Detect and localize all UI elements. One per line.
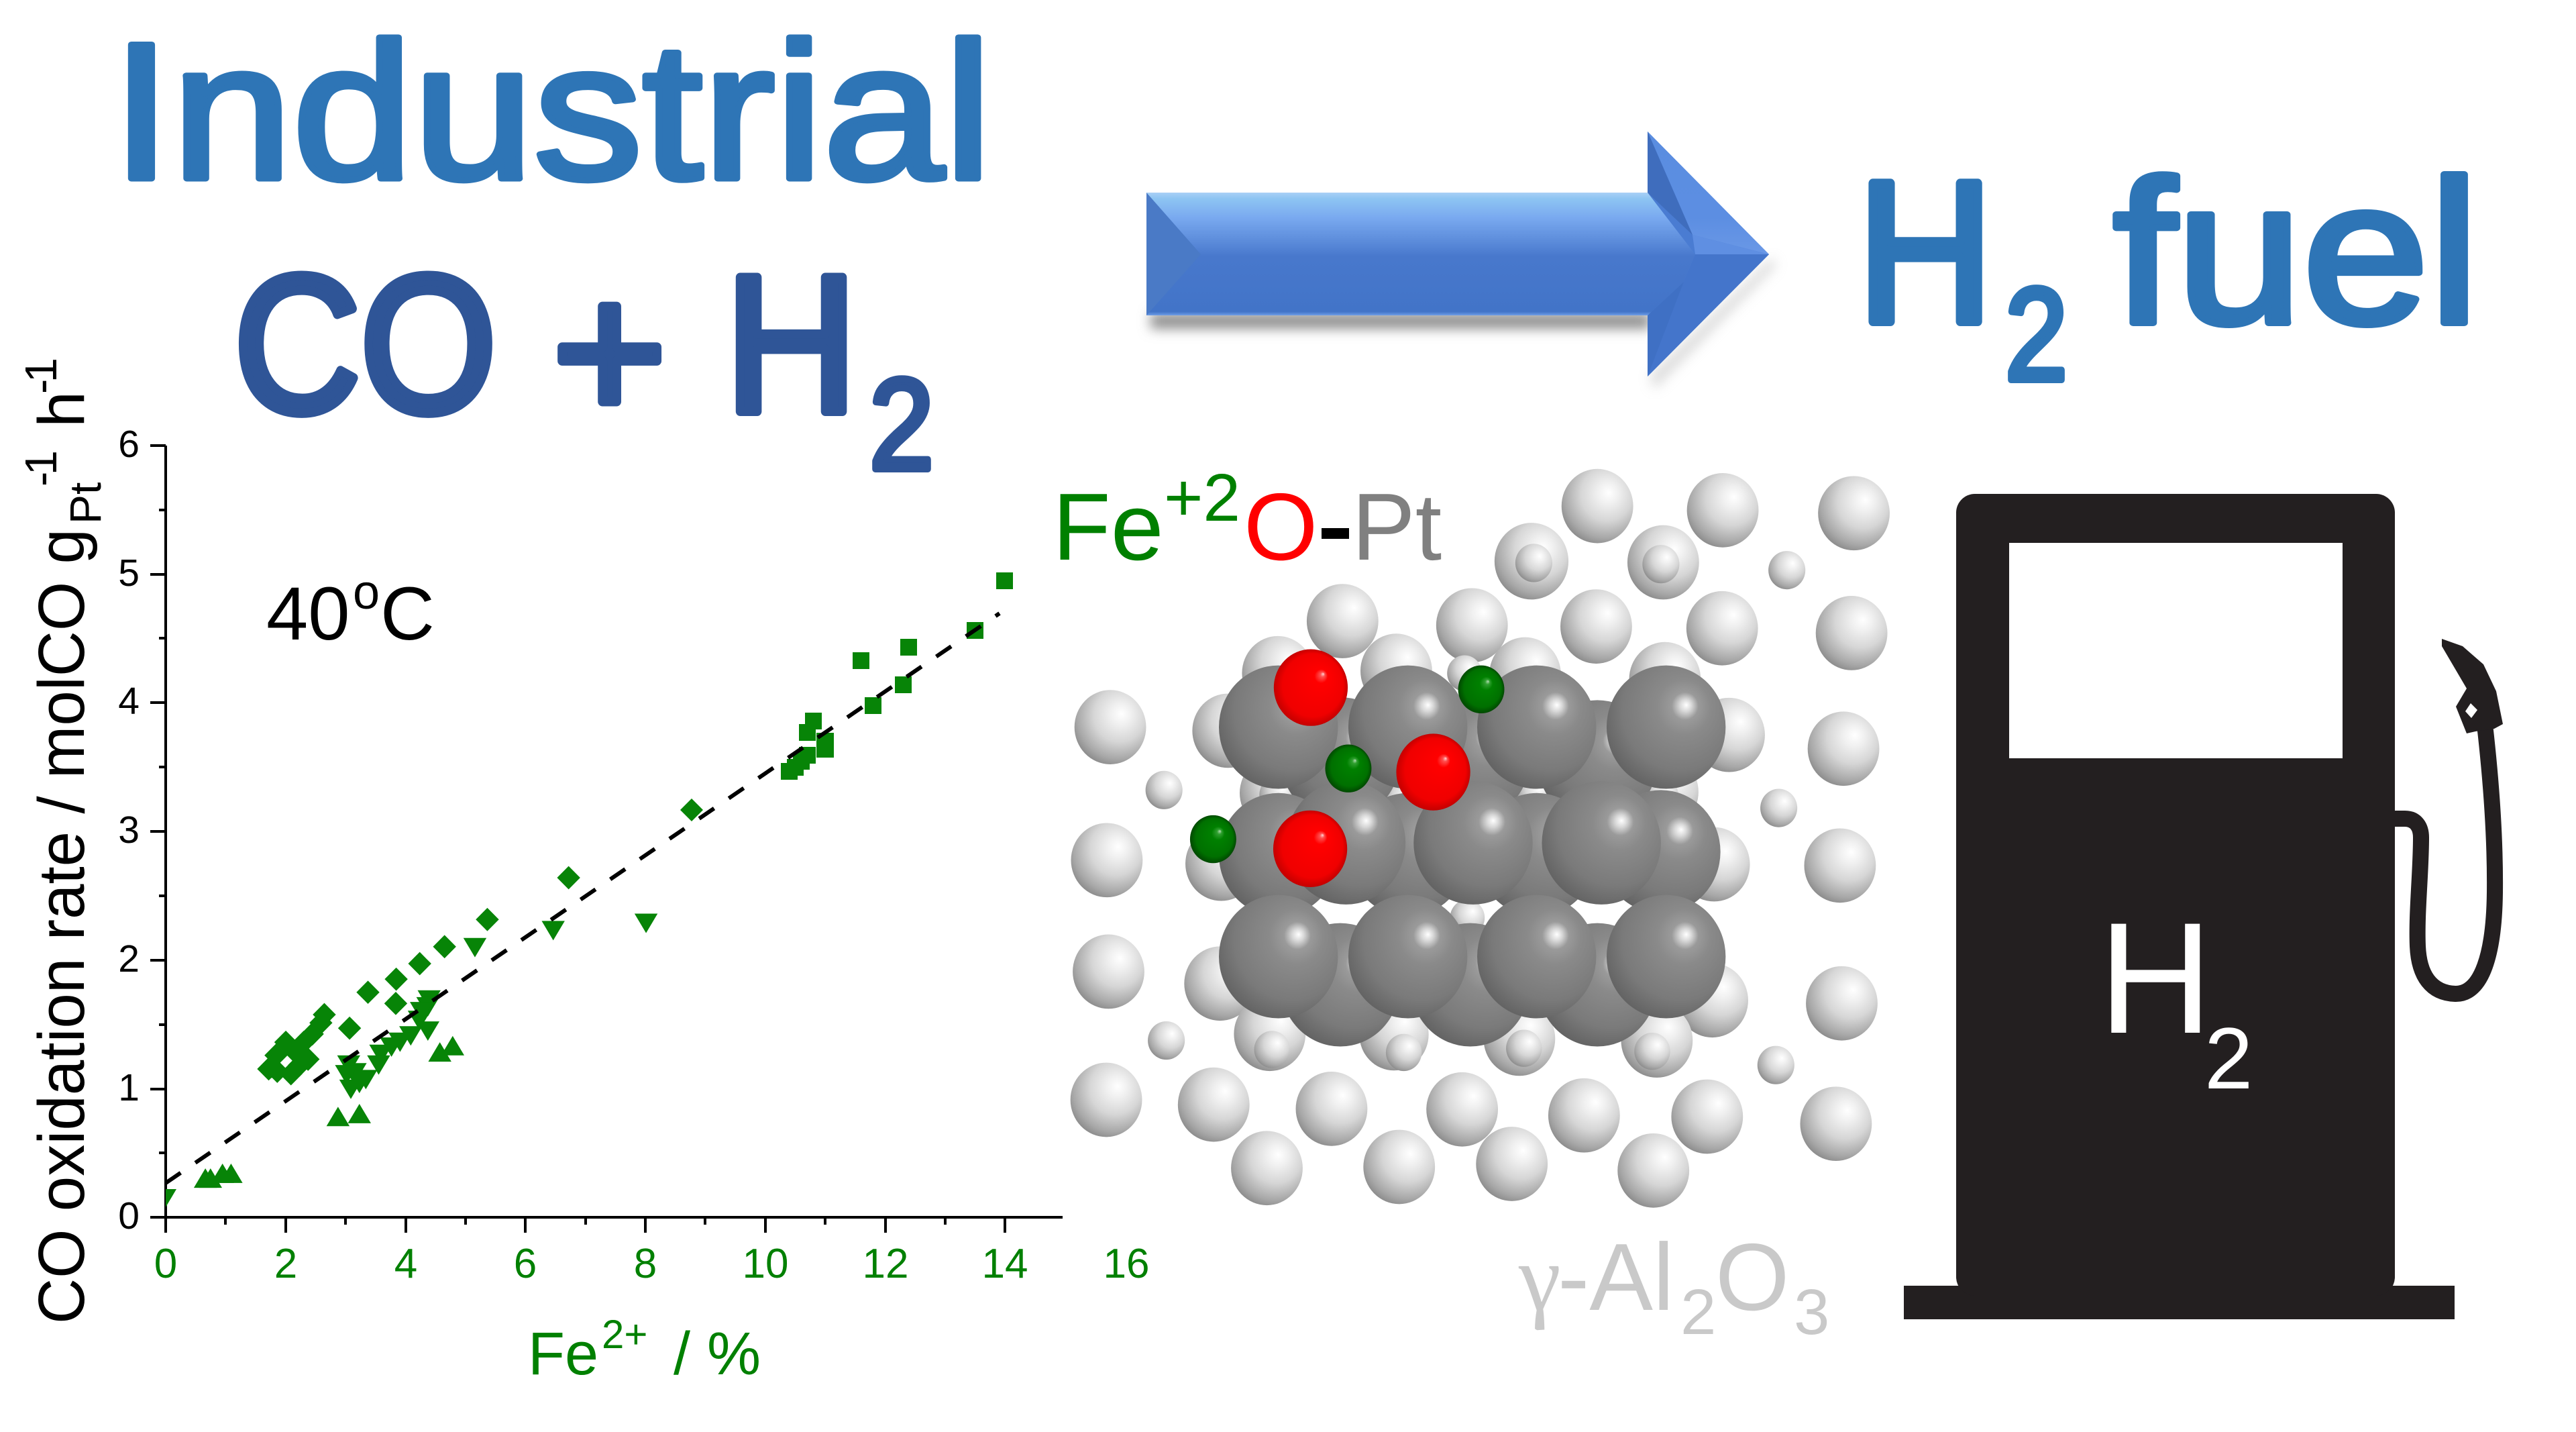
x tick labels: 2: [274, 1241, 297, 1287]
temperature label: o: [353, 566, 380, 619]
axes and ticks: [150, 446, 1063, 1233]
x tick labels: 12: [863, 1241, 908, 1287]
heading: Fe+2O-Pt label: +2: [1164, 460, 1240, 535]
y tick labels: [118, 423, 140, 1237]
y tick labels: 0: [118, 1194, 140, 1237]
heading: H2 fuel: H: [1858, 140, 1993, 364]
temperature label: [266, 566, 435, 656]
heading: H2 fuel: [1858, 138, 2479, 408]
label: gamma alumina: 2: [1680, 1276, 1716, 1348]
pump base: [1904, 1286, 2455, 1319]
hose: [2392, 725, 2495, 994]
y tick labels: 2: [118, 937, 140, 980]
heading: H2 fuel: 2: [2005, 261, 2068, 408]
x tick labels: 10: [743, 1241, 788, 1287]
x tick labels: 4: [394, 1241, 417, 1287]
x tick labels: 14: [982, 1241, 1028, 1287]
pump screen: [2009, 543, 2343, 758]
heading: CO + H2: H: [725, 236, 857, 453]
heading: Fe+2O-Pt label: Pt: [1352, 474, 1442, 580]
y tick labels: 6: [118, 423, 140, 466]
x axis title: Fe: [528, 1321, 598, 1388]
icon: hydrogen fuel pump: [1904, 494, 2503, 1319]
heading: CO + H2: [234, 236, 934, 497]
pump H2 label: H: [2098, 890, 2212, 1067]
heading: Fe+2O-Pt label: O: [1244, 474, 1318, 580]
label: gamma alumina: [1518, 1224, 1829, 1348]
x axis title: 2+: [602, 1312, 647, 1357]
x tick labels: 16: [1104, 1241, 1149, 1287]
x tick labels: 0: [154, 1241, 177, 1287]
x axis title: / %: [674, 1321, 761, 1388]
heading: CO + H2: +: [553, 243, 666, 460]
oxygen atoms: [1273, 650, 1470, 887]
chart: CO oxidation rate vs Fe2+: [16, 358, 1149, 1388]
heading: Fe+2O-Pt label: Fe: [1053, 474, 1164, 580]
y axis title: -1: [16, 358, 66, 394]
y tick labels: 1: [118, 1066, 140, 1109]
y axis title: CO oxidation rate / molCO g: [25, 529, 98, 1324]
x tick labels: 8: [634, 1241, 657, 1287]
heading: CO + H2: 2: [869, 352, 934, 497]
iron atoms: [1190, 666, 1504, 863]
pump body: [1956, 494, 2395, 1296]
data marker at origin: [166, 1189, 176, 1207]
alumina atoms: [1071, 469, 1890, 1208]
fit line: [166, 613, 1000, 1183]
molecule: Fe-O clusters on Pt on alumina: [1071, 469, 1890, 1208]
y tick labels: 5: [118, 552, 140, 595]
label: gamma alumina: 3: [1794, 1276, 1829, 1348]
y tick labels: 4: [118, 680, 140, 723]
temperature label: 40: [266, 572, 350, 656]
nozzle: [2442, 639, 2503, 733]
pump H2 label: 2: [2204, 1009, 2253, 1107]
y axis title: h: [25, 391, 98, 427]
x axis title: [528, 1312, 761, 1388]
label: gamma alumina: O: [1715, 1224, 1789, 1331]
temperature label: C: [380, 572, 435, 656]
arrow: reaction direction: [1146, 132, 1776, 389]
y axis title: Pt: [60, 482, 110, 524]
data markers: triangles and diamonds: [194, 866, 657, 1188]
x tick labels: 6: [514, 1241, 537, 1287]
heading: CO + H2: CO: [234, 236, 496, 453]
x tick labels: [154, 1241, 1149, 1287]
y axis title: [16, 358, 110, 1324]
y tick labels: 3: [118, 809, 140, 852]
label: gamma alumina: -Al: [1558, 1224, 1674, 1331]
heading: Fe+2O-Pt label: [1053, 460, 1442, 580]
heading: H2 fuel: fuel: [2113, 138, 2479, 366]
heading: Industrial: Industrial: [111, 3, 992, 220]
pump H2 label: [2098, 890, 2253, 1107]
platinum atoms: [1219, 666, 1725, 1047]
label: gamma alumina: γ: [1518, 1225, 1561, 1331]
data markers: squares: [680, 572, 1013, 821]
y axis title: -1: [16, 450, 66, 487]
